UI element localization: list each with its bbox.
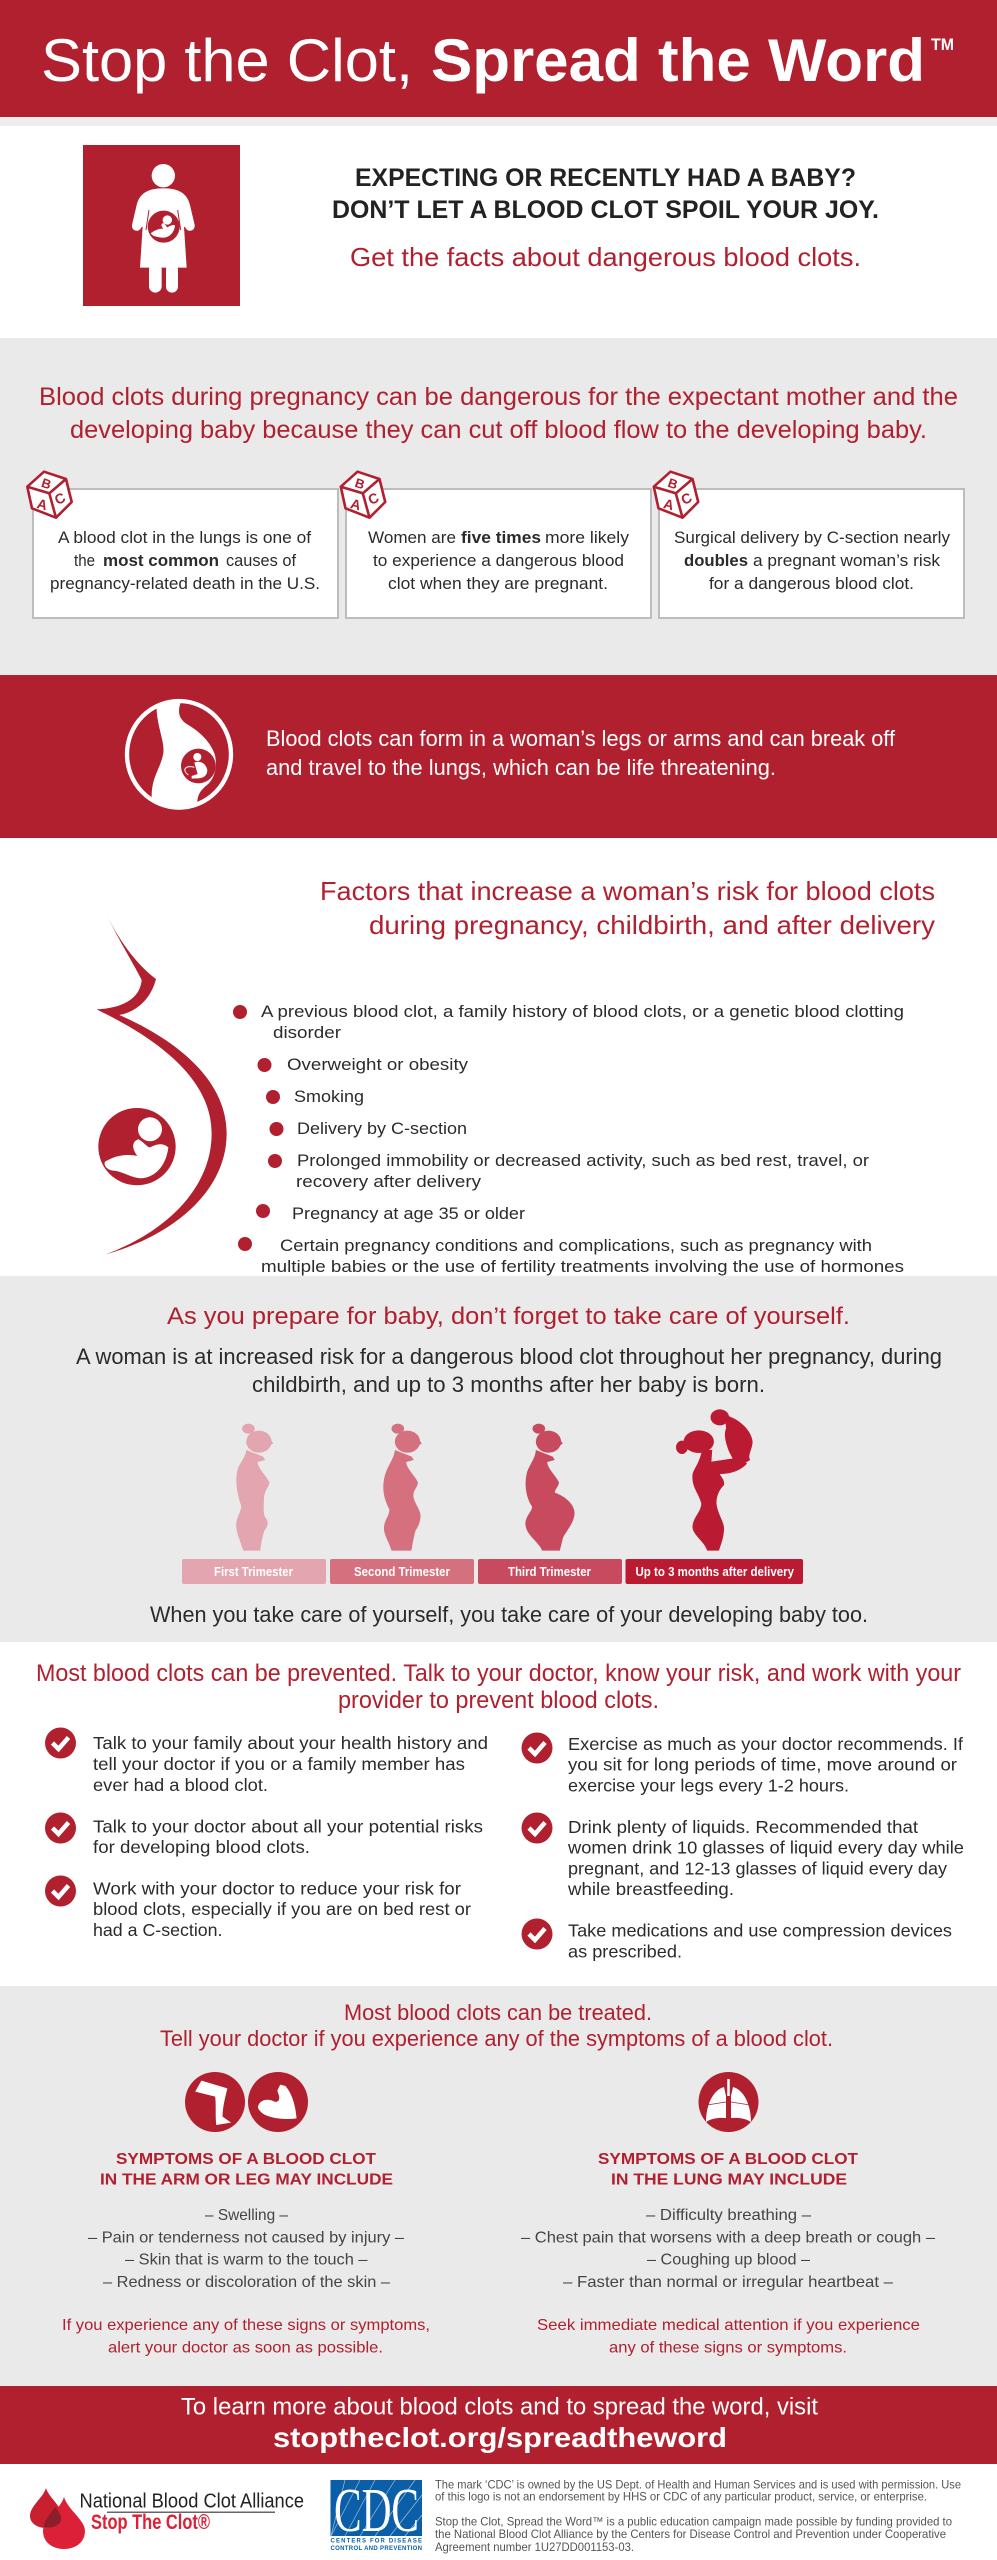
column: arm or leg symptoms: alert your doctor as soon as possible.: [108, 2340, 383, 2356]
card: five times fact: five times: [461, 529, 541, 547]
card: C-section fact: [659, 489, 964, 618]
prevention item: drink liquids: pregnant, and 12-13 glasses of liquid every day: [568, 1858, 947, 1878]
card: lungs fact: A blood clot in the lungs is one of: [58, 529, 311, 547]
icon: ABC block 1: C: [52, 489, 68, 508]
label: second trimester: Second Trimester: [354, 1565, 450, 1579]
intro heading: Get the facts about dangerous blood clots.: [350, 242, 861, 272]
list: risk factors: [233, 1002, 904, 1276]
prevention item: drink liquids: women drink 10 glasses of liquid every day while: [567, 1838, 964, 1858]
icon: pregnant belly outline with fetus: [97, 913, 227, 1255]
card: lungs fact: causes of: [226, 552, 296, 570]
prevention item: reduce risk: [45, 1876, 471, 1940]
card: five times fact: Women are: [368, 529, 456, 547]
label: first trimester: [182, 1559, 326, 1584]
column: arm or leg symptoms: – Swelling –: [205, 2207, 288, 2224]
fine print: of this logo is not an endorsement by HHS or CDC of any particular product, service, or enterprise.: [435, 2490, 927, 2504]
card: lungs fact: pregnancy-related death in the U.S.: [50, 575, 320, 593]
prevention item: exercise: you sit for long periods of time, move around or: [568, 1754, 957, 1774]
panel: dangers of blood clots: [0, 338, 997, 675]
prevention item: talk to family: tell your doctor if you or a family member has: [93, 1754, 465, 1774]
column: arm or leg symptoms: [62, 2151, 430, 2356]
text: risk throughout pregnancy: A woman is at increased risk for a dangerous blood clot throughout her pregnancy, during: [76, 1344, 942, 1369]
card: five times fact: to experience a dangerous blood: [373, 552, 624, 570]
fine print: Agreement number 1U27DD001153-03.: [435, 2540, 634, 2554]
icon: pregnant torso in circle: [127, 700, 231, 813]
header banner: Stop the Clot,: [41, 27, 413, 94]
column: arm or leg symptoms: IN THE ARM OR LEG MAY INCLUDE: [100, 2172, 393, 2188]
column: lung symptoms: Seek immediate medical attention if you experience: [537, 2317, 920, 2334]
chart: pregnancy timeline silhouettes: [182, 1409, 803, 1584]
logo: National Blood Clot Alliance: Stop The Clot®: [91, 2511, 210, 2534]
list: risk factors: Pregnancy at age 35 or older: [292, 1204, 525, 1223]
heading: risk factors: during pregnancy, childbirth, and after delivery: [369, 910, 935, 940]
panel: call to action: To learn more about blood clots and to spread the word, visit: [181, 2394, 818, 2420]
heading: dangers: developing baby because they can cut off blood flow to the developing baby.: [70, 416, 927, 444]
logo: CDC: [330, 2477, 422, 2552]
icon: ABC block 2: [341, 472, 385, 518]
heading: prevention: Most blood clots can be prevented. Talk to your doctor, know your risk, and work with your: [36, 1660, 961, 1687]
card: C-section fact: a pregnant woman’s risk: [753, 552, 941, 570]
heading: dangers: Blood clots during pregnancy can be dangerous for the expectant mother and the: [39, 383, 958, 411]
text: take care of developing baby: When you take care of yourself, you take care of your developing baby too.: [150, 1602, 868, 1627]
panel: take care of yourself: [0, 1276, 997, 1642]
list: risk factors: Delivery by C-section: [297, 1119, 467, 1138]
list: risk factors: Smoking: [294, 1087, 364, 1106]
column: lung symptoms: [521, 2151, 935, 2356]
prevention item: drink liquids: [522, 1812, 964, 1899]
prevention item: exercise: Exercise as much as your doctor recommends. If: [568, 1734, 963, 1754]
column: arm or leg symptoms: – Pain or tenderness not caused by injury –: [88, 2230, 404, 2246]
heading: treatment: Tell your doctor if you experience any of the symptoms of a blood clot.: [160, 2026, 833, 2051]
intro heading: [332, 164, 879, 272]
logo: CDC: CENTERS FOR DISEASE: [330, 2538, 422, 2544]
icon: pregnant woman: [83, 145, 240, 306]
card: C-section fact: doubles: [684, 552, 748, 570]
prevention item: reduce risk: Work with your doctor to reduce your risk for: [93, 1878, 461, 1898]
icon: ABC block 2: A: [349, 495, 363, 513]
prevention item: medications: Take medications and use compression devices: [568, 1920, 952, 1940]
prevention item: potential risks: [45, 1812, 483, 1857]
header banner: [0, 0, 997, 126]
heading: prevention: provider to prevent blood clots.: [338, 1687, 659, 1714]
icon: arm: [248, 2072, 308, 2132]
text: clots can travel: [266, 726, 896, 780]
icon: ABC block 3: [654, 472, 698, 518]
label: up to 3 months after delivery: [626, 1559, 803, 1584]
text: risk throughout pregnancy: [76, 1344, 942, 1397]
column: arm or leg symptoms: – Redness or discoloration of the skin –: [103, 2274, 390, 2291]
silhouette: third trimester: [525, 1424, 575, 1551]
icon: ABC block 2: C: [365, 489, 381, 508]
heading: dangers: [39, 383, 958, 444]
prevention item: talk to family: [45, 1728, 488, 1795]
column: lung symptoms: – Difficulty breathing –: [646, 2207, 811, 2224]
logo: National Blood Clot Alliance: [30, 2488, 304, 2549]
fine print: [435, 2478, 961, 2554]
column: lung symptoms: SYMPTOMS OF A BLOOD CLOT: [598, 2151, 858, 2168]
heading: treatment: [160, 2000, 833, 2051]
list: risk factors: Prolonged immobility or decreased activity, such as bed rest, travel, or: [297, 1151, 869, 1170]
silhouette: first trimester: [236, 1424, 273, 1551]
logo: National Blood Clot Alliance: National Blood Clot Alliance: [80, 2490, 304, 2512]
label: second trimester: [330, 1559, 474, 1584]
logo: CDC: CONTROL AND PREVENTION: [330, 2546, 422, 2552]
column: arm or leg symptoms: SYMPTOMS OF A BLOOD CLOT: [116, 2151, 376, 2168]
icon: ABC block 3: C: [678, 489, 694, 508]
panel: call to action: [0, 2386, 997, 2464]
column: arm or leg symptoms: – Skin that is warm to the touch –: [125, 2252, 368, 2268]
silhouette: mother lifting baby: [676, 1409, 753, 1551]
intro heading: EXPECTING OR RECENTLY HAD A BABY?: [355, 164, 856, 192]
column: lung symptoms: any of these signs or symptoms.: [609, 2340, 847, 2356]
card: lungs fact: the: [74, 552, 95, 570]
icon: ABC block 1: B: [40, 475, 53, 492]
icon: ABC block 3: B: [666, 475, 680, 492]
label: third trimester: [478, 1559, 622, 1584]
prevention item: exercise: exercise your legs every 1-2 hours.: [568, 1776, 849, 1796]
panel: call to action: stoptheclot.org/spreadtheword: [273, 2422, 727, 2453]
prevention item: medications: as prescribed.: [568, 1942, 682, 1962]
list: risk factors: disorder: [273, 1023, 341, 1042]
label: first trimester: First Trimester: [214, 1565, 293, 1579]
icon: lungs: [698, 2072, 758, 2132]
prevention item: potential risks: for developing blood clots.: [93, 1837, 310, 1857]
card: five times fact: [346, 489, 651, 618]
icon: ABC block 2: B: [353, 475, 367, 492]
column: lung symptoms: – Chest pain that worsens with a deep breath or cough –: [521, 2230, 935, 2246]
list: risk factors: Certain pregnancy conditions and complications, such as pregnancy with: [280, 1236, 872, 1255]
card: C-section fact: Surgical delivery by C-section nearly: [674, 529, 951, 547]
heading: risk factors: Factors that increase a woman’s risk for blood clots: [320, 876, 935, 906]
column: lung symptoms: IN THE LUNG MAY INCLUDE: [611, 2172, 847, 2188]
text: clots can travel: Blood clots can form in a woman’s legs or arms and can break off: [266, 726, 896, 751]
prevention item: talk to family: Talk to your family about your health history and: [93, 1733, 488, 1753]
panel: red band, clots can travel: [0, 675, 997, 838]
text: risk throughout pregnancy: childbirth, and up to 3 months after her baby is born.: [252, 1372, 765, 1397]
fine print: The mark ‘CDC’ is owned by the US Dept. of Health and Human Services and is used with permission. Use: [435, 2478, 961, 2492]
panel: symptoms: [0, 1986, 997, 2386]
card: lungs fact: [33, 489, 338, 618]
icon: ABC block 1: A: [35, 495, 49, 513]
prevention item: exercise: [522, 1732, 963, 1796]
card: five times fact: clot when they are pregnant.: [388, 575, 608, 593]
intro heading: DON’T LET A BLOOD CLOT SPOIL YOUR JOY.: [332, 196, 879, 224]
column: lung symptoms: – Faster than normal or irregular heartbeat –: [563, 2274, 893, 2291]
heading: take care: As you prepare for baby, don’t forget to take care of yourself.: [167, 1303, 850, 1330]
card: C-section fact: for a dangerous blood clot.: [709, 575, 914, 593]
fine print: Stop the Clot, Spread the Word™ is a public education campaign made possible by funding provided to: [435, 2515, 952, 2529]
icon: ABC block 1: [27, 472, 72, 518]
text: clots can travel: and travel to the lungs, which can be life threatening.: [266, 755, 776, 780]
column: arm or leg symptoms: If you experience any of these signs or symptoms,: [62, 2317, 430, 2334]
logo: CDC: CDC: [334, 2477, 419, 2545]
list: risk factors: Overweight or obesity: [287, 1055, 469, 1074]
list: risk factors: recovery after delivery: [296, 1172, 482, 1191]
prevention item: reduce risk: had a C-section.: [93, 1920, 222, 1940]
card: five times fact: more likely: [545, 529, 630, 547]
fine print: the National Blood Clot Alliance by the Centers for Disease Control and Prevention under Cooperative: [435, 2527, 946, 2541]
list: risk factors: multiple babies or the use of fertility treatments involving the use of hormones: [261, 1257, 904, 1276]
prevention item: talk to family: ever had a blood clot.: [93, 1775, 268, 1795]
prevention item: potential risks: Talk to your doctor about all your potential risks: [93, 1816, 483, 1836]
label: up to 3 months after delivery: Up to 3 months after delivery: [636, 1565, 794, 1579]
label: third trimester: Third Trimester: [508, 1565, 591, 1579]
prevention item: drink liquids: while breastfeeding.: [567, 1879, 734, 1899]
icon: leg: [185, 2072, 245, 2132]
card: lungs fact: most common: [103, 552, 219, 570]
prevention item: reduce risk: blood clots, especially if you are on bed rest or: [93, 1899, 471, 1919]
prevention item: drink liquids: Drink plenty of liquids. Recommended that: [568, 1817, 918, 1837]
column: lung symptoms: – Coughing up blood –: [647, 2252, 810, 2268]
silhouette: second trimester: [383, 1424, 422, 1551]
header banner: Spread the Word: [431, 27, 925, 94]
heading: risk factors: [320, 876, 935, 940]
icon: ABC block 3: A: [662, 495, 676, 513]
header banner: TM: [931, 35, 954, 54]
heading: treatment: Most blood clots can be treated.: [344, 2000, 652, 2025]
heading: prevention: [36, 1660, 961, 1714]
prevention item: medications: [522, 1918, 952, 1962]
list: risk factors: A previous blood clot, a family history of blood clots, or a genetic blood clotting: [261, 1002, 904, 1021]
